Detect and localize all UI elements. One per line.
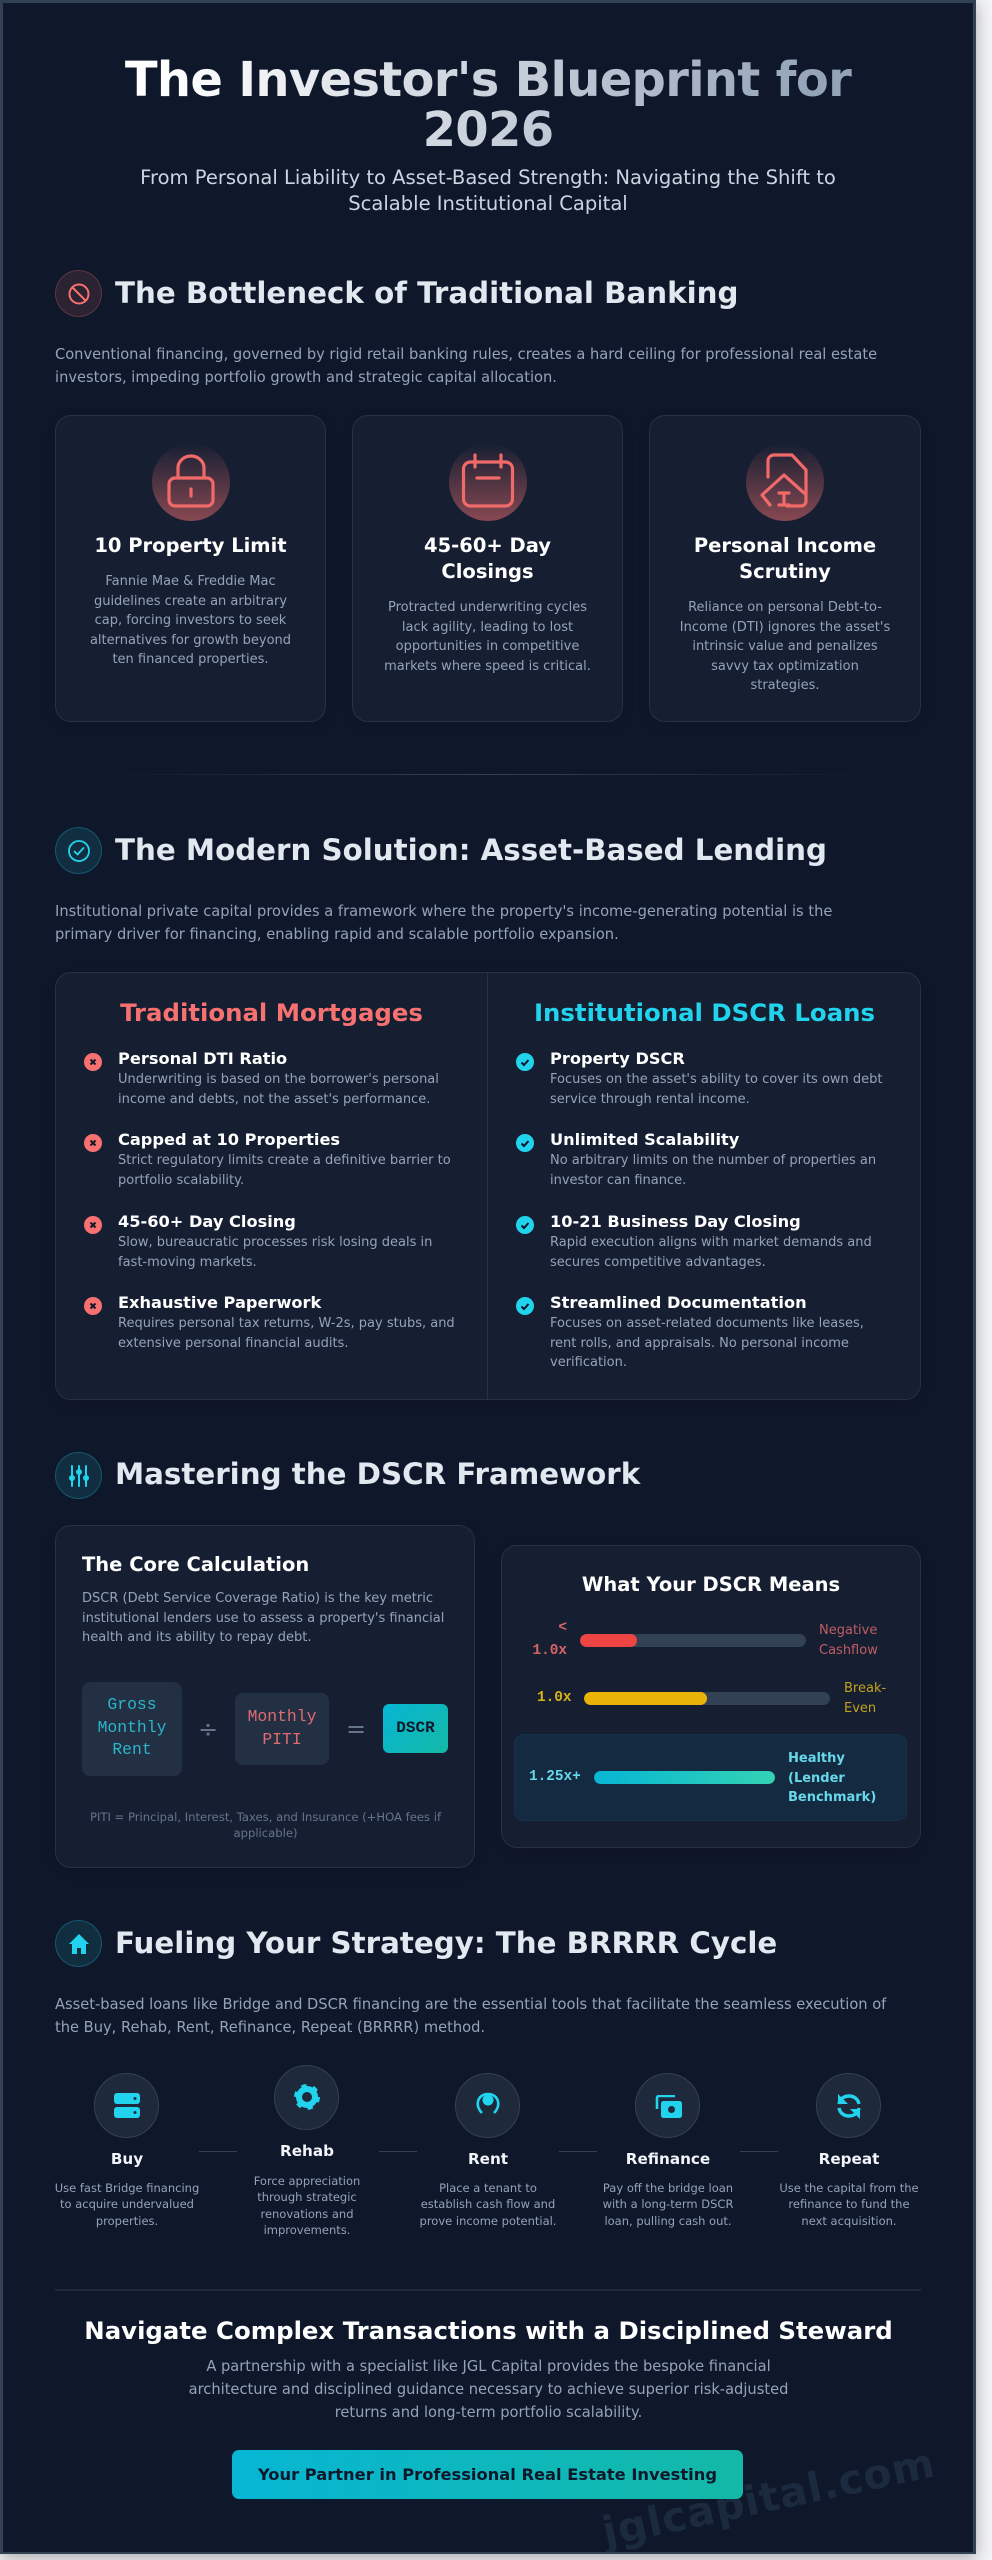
card text: personal income scrutiny: strategies. [750,678,820,693]
formula result: dscr: DSCR [396,1719,435,1737]
step: rehab: improvements. [264,2223,350,2237]
icon: gear [274,2065,339,2130]
step: refinance: with a long-term DSCR [603,2197,733,2211]
step: refinance: Pay off the bridge loan [603,2181,733,2195]
card text: 45-60+ day closings: lack agility, leading to lost [402,620,573,634]
item: 45-60 day closing: fast-moving markets. [118,1254,257,1270]
heading: brrrr cycle: Fueling Your Strategy: The BRRRR Cycle [115,1926,777,1960]
card text: 45-60+ day closings [384,534,591,674]
panel: comparison [55,972,921,1400]
heading: institutional dscr: Institutional DSCR Loans [534,998,875,1027]
item: capped at 10: Capped at 10 Properties [118,1130,340,1149]
card text: 10 property limit [90,534,291,667]
card text: 45-60+ day closings: Protracted underwriting cycles [388,600,587,615]
section icon: house [55,1920,102,1967]
card text: 10 property limit: alternatives for growth beyond [90,632,291,648]
section icon: check [55,827,102,874]
intro: brrrr [55,1996,887,2036]
text: dscr definition: health and its ability to repay debt. [82,1630,311,1645]
footer text: A partnership with a specialist like JGL Capital provides the bespoke financial [206,2358,771,2375]
formula box: gross monthly rent: Monthly [98,1718,166,1737]
item: capped at 10: Strict regulatory limits create a definitive barrier to [118,1153,451,1168]
step: buy: properties. [96,2214,158,2228]
item: streamlined documentation: rent rolls, and appraisals. No personal income [550,1336,849,1350]
intro: modern solution: Institutional private capital provides a framework where the property's income-generating potential is the [55,903,832,920]
step: rehab: renovations and [260,2207,354,2221]
formula box: monthly piti [235,1693,329,1765]
step: buy: to acquire undervalued [60,2197,194,2211]
item: personal dti [84,1049,439,1106]
step: rehab: Rehab [280,2142,334,2160]
item: streamlined documentation: Streamlined Documentation [550,1293,807,1312]
intro: bottleneck: Conventional financing, governed by rigid retail banking rules, creates a hard ceiling for professional real estate [55,346,877,363]
item: personal dti: Personal DTI Ratio [118,1049,287,1068]
step: repeat: next acquisition. [801,2214,897,2228]
watermark: jglcapital.com [598,2439,940,2554]
item: streamlined documentation [516,1293,864,1370]
footer text: architecture and disciplined guidance necessary to achieve superior risk-adjusted [189,2381,788,2398]
operator: equals: = [346,1715,366,1743]
row: negative cashflow: Cashflow [819,1642,878,1658]
card text: personal income scrutiny [680,534,890,693]
intro: modern solution: primary driver for financing, enabling rapid and scalable portfolio expansion. [55,926,619,943]
item: unlimited scalability [516,1130,876,1188]
subtitle: Scalable Institutional Capital [348,192,628,215]
step: rehab: Force appreciation [254,2174,360,2188]
card text: personal income scrutiny: Scrutiny [739,560,831,583]
card text: 10 property limit: cap, forcing investors to seek [95,613,286,628]
icon: document with house [746,443,824,521]
formula: dscr [82,1682,448,1776]
formula box: gross monthly rent [82,1682,182,1776]
card text: personal income scrutiny: savvy tax optimization [711,658,859,674]
icon: lock [152,443,230,521]
step: buy [55,2073,199,2228]
call to action button [232,2450,743,2499]
section icon: sliders [55,1452,102,1499]
formula box: gross monthly rent: Rent [112,1740,152,1759]
intro: brrrr: Asset-based loans like Bridge and DSCR financing are the essential tools that facilitate the seamless execution of [55,1996,886,2013]
footer text [189,2358,788,2421]
item: property dscr: Focuses on the asset's ability to cover its own debt [550,1072,883,1087]
item: 10-21 day closing: Rapid execution aligns with market demands and [550,1235,872,1250]
text: dscr definition: DSCR (Debt Service Coverage Ratio) is the key metric [82,1591,433,1606]
item: property dscr: Property DSCR [550,1049,685,1068]
subtitle: From Personal Liability to Asset-Based Strength: Navigating the Shift to [140,166,836,189]
icon: server [94,2073,159,2138]
intro: modern solution [55,903,832,943]
text: dscr definition [82,1591,444,1645]
panel: dscr meaning [501,1545,921,1848]
footer heading: Navigate Complex Transactions with a Disciplined Steward [84,2316,893,2345]
icon: sync arrows [816,2073,881,2138]
item: 45-60 day closing [84,1212,432,1270]
row: healthy [514,1734,907,1821]
step: refinance: Refinance [626,2150,710,2168]
item: personal dti: Underwriting is based on the borrower's personal [118,1072,439,1087]
card text: personal income scrutiny: Reliance on personal Debt-to- [688,600,882,615]
step: rehab [254,2065,360,2237]
intro: bottleneck [55,346,877,386]
card text: personal income scrutiny: intrinsic value and penalizes [692,639,878,654]
card: 45-60+ day closings [352,415,623,722]
intro: brrrr: the Buy, Rehab, Rent, Refinance, Repeat (BRRRR) method. [55,2019,485,2036]
step: refinance [603,2073,734,2228]
icon: person arc [455,2073,520,2138]
step: rent: Rent [468,2150,508,2168]
step: repeat: refinance to fund the [788,2197,910,2211]
step: repeat: Repeat [819,2150,879,2168]
footer text: returns and long-term portfolio scalability. [335,2404,642,2421]
heading: traditional mortgages: Traditional Mortgages [120,998,423,1027]
formula box: monthly piti: PITI [262,1730,302,1749]
heading: modern solution: The Modern Solution: Asset-Based Lending [115,833,827,867]
item: unlimited scalability: investor can finance. [550,1172,686,1188]
item: streamlined documentation: verification. [550,1355,627,1370]
formula box: gross monthly rent: Gross [107,1695,157,1714]
heading: core calculation: The Core Calculation [82,1553,309,1576]
row: negative cashflow: Negative [819,1623,877,1638]
card text: 45-60+ day closings: opportunities in competitive [396,639,579,654]
row: negative cashflow: 1.0x [532,1643,567,1659]
card: personal income scrutiny [649,415,921,722]
item: streamlined documentation: Focuses on asset-related documents like leases, [550,1316,864,1331]
text: dscr definition: institutional lenders use to assess a property's financial [82,1610,444,1626]
card text: 10 property limit: Fannie Mae & Freddie Mac [105,574,276,589]
card text: 10 property limit: ten financed properties. [112,652,269,667]
row: break-even: 1.0x [537,1690,572,1706]
heading: dscr meaning: What Your DSCR Means [582,1573,840,1596]
item: property dscr [516,1049,883,1106]
item: 10-21 day closing [516,1212,872,1270]
row: negative cashflow: < [558,1620,567,1636]
title [108,55,868,155]
row: break-even [537,1681,886,1716]
step: rent: prove income potential. [420,2214,556,2228]
step: buy: Buy [111,2150,143,2168]
item: 10-21 day closing: 10-21 Business Day Closing [550,1212,801,1231]
call to action button: Your Partner in Professional Real Estate Investing [258,2465,717,2484]
card text: 10 property limit: 10 Property Limit [94,534,287,557]
icon: money stack [635,2073,700,2138]
section icon: ban [55,270,102,317]
intro: bottleneck: investors, impeding portfolio growth and strategic capital allocation. [55,369,557,386]
row: healthy: Benchmark) [788,1790,876,1805]
panel: core calculation [55,1525,475,1868]
step: rent: Place a tenant to [439,2181,537,2195]
heading: bottleneck: The Bottleneck of Traditional Banking [115,276,738,310]
item: exhaustive paperwork: Exhaustive Paperwork [118,1293,321,1312]
step: repeat: Use the capital from the [779,2181,919,2195]
row: healthy: (Lender [788,1770,845,1786]
note: piti: PITI = Principal, Interest, Taxes, and Insurance (+HOA fees if [90,1810,441,1824]
card text: personal income scrutiny: Personal Income [694,534,876,557]
item: 45-60 day closing: 45-60+ Day Closing [118,1212,296,1231]
formula result: dscr [383,1704,448,1753]
card text: 45-60+ day closings: Closings [441,560,534,583]
step: rent [420,2073,556,2228]
item: exhaustive paperwork: extensive personal financial audits. [118,1336,348,1350]
step: rent: establish cash flow and [421,2197,555,2211]
icon: calendar [449,443,527,521]
item: unlimited scalability: No arbitrary limits on the number of properties an [550,1153,876,1168]
note: piti [90,1810,442,1840]
item: unlimited scalability: Unlimited Scalability [550,1130,739,1149]
card: 10 property limit [55,415,326,722]
card text: 45-60+ day closings: 45-60+ Day [424,534,551,557]
title: 2026 [423,102,553,158]
formula box: monthly piti: Monthly [248,1707,316,1726]
row: negative cashflow [532,1620,878,1659]
title: The Investor's Blueprint for [125,52,851,108]
row: break-even: Break- [844,1681,886,1696]
item: personal dti: income and debts, not the asset's performance. [118,1092,430,1106]
card text: 10 property limit: guidelines create an arbitrary [94,594,287,608]
item: 10-21 day closing: secures competitive advantages. [550,1254,766,1270]
step: repeat [779,2073,919,2228]
connectors [199,2151,778,2152]
row: healthy: 1.25x+ [529,1769,581,1785]
card text: 45-60+ day closings: markets where speed is critical. [384,658,591,674]
item: property dscr: service through rental income. [550,1092,750,1106]
operator: divide: ÷ [198,1715,218,1743]
row: healthy: Healthy [788,1751,845,1766]
row: break-even: Even [844,1700,876,1716]
step: rehab: through strategic [257,2190,357,2204]
heading: mastering dscr: Mastering the DSCR Framework [115,1457,640,1491]
step: buy: Use fast Bridge financing [55,2181,199,2195]
card text: personal income scrutiny: Income (DTI) ignores the asset's [680,620,890,634]
item: exhaustive paperwork [84,1293,455,1350]
subtitle [140,166,836,215]
step: refinance: loan, pulling cash out. [604,2214,732,2228]
item: capped at 10: portfolio scalability. [118,1172,244,1188]
item: 45-60 day closing: Slow, bureaucratic processes risk losing deals in [118,1235,432,1250]
note: piti: applicable) [234,1826,297,1840]
item: capped at 10 [84,1130,451,1188]
item: exhaustive paperwork: Requires personal tax returns, W-2s, pay stubs, and [118,1316,455,1331]
